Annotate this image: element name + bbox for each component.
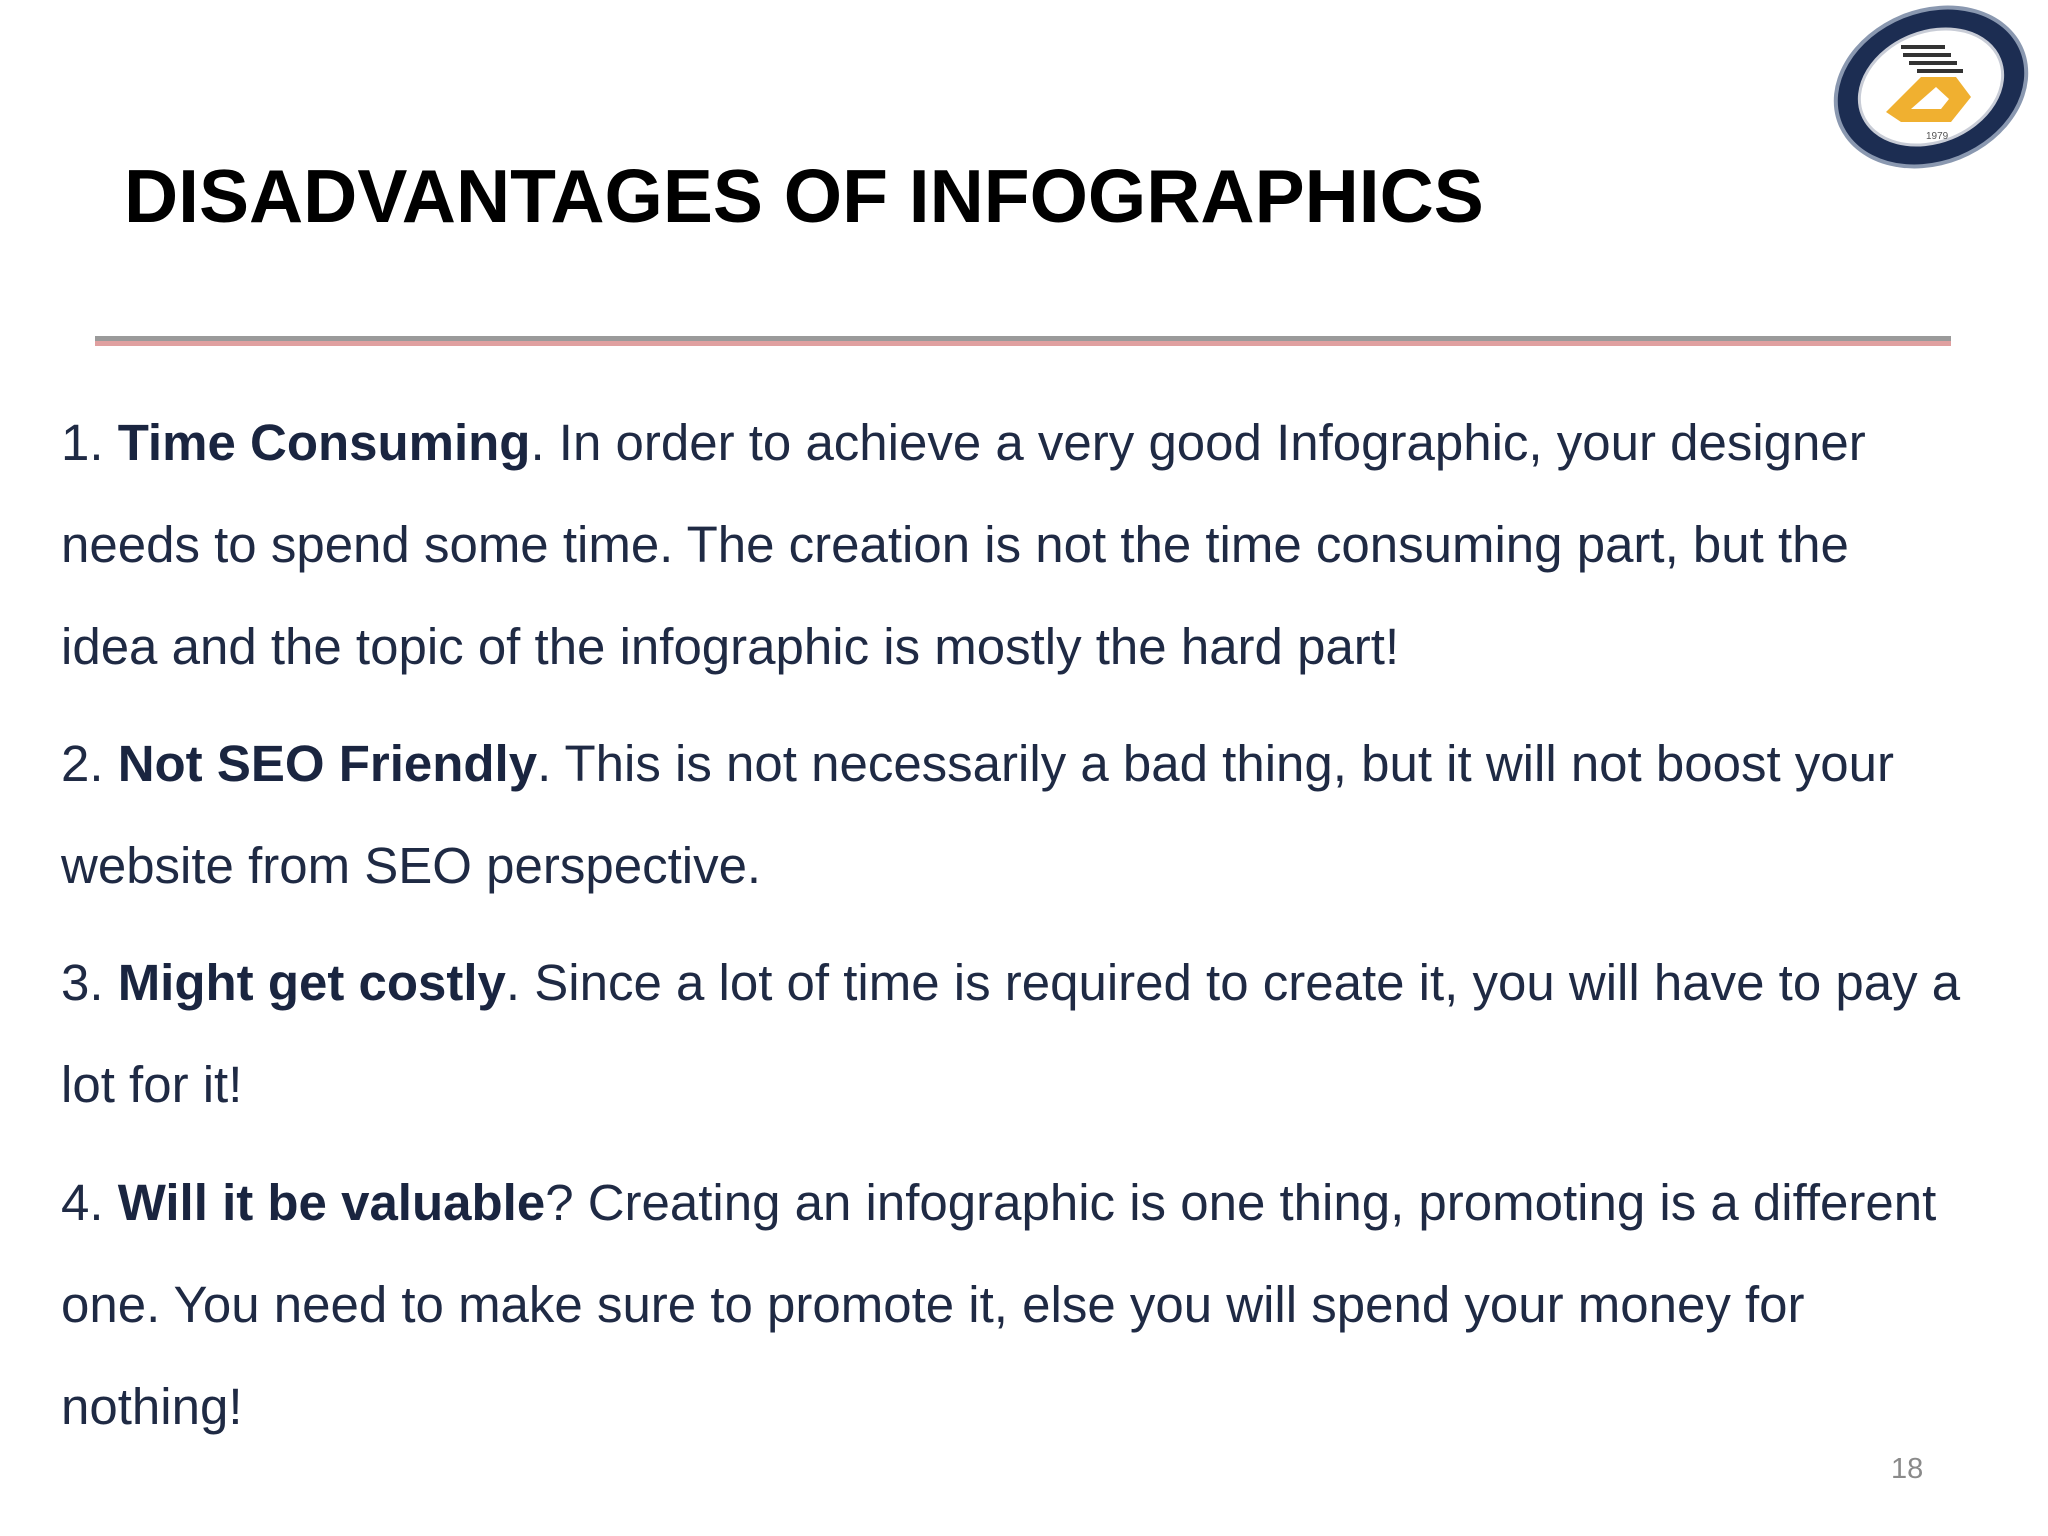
logo: 1979 [1926, 131, 1949, 142]
text: nothing! [61, 1378, 242, 1435]
text: lot for it! [61, 1056, 242, 1113]
item 4 [61, 1174, 1936, 1435]
text: website from SEO perspective. [61, 837, 761, 894]
title: DISADVANTAGES OF INFOGRAPHICS [124, 154, 1484, 238]
item 1 [61, 414, 1866, 675]
text: 3. Might get costly. Since a lot of time is required to create it, you will have to pay a [61, 954, 1960, 1011]
item 3 [61, 954, 1960, 1113]
text: 1. Time Consuming. In order to achieve a very good Infographic, your designer [61, 414, 1866, 471]
text: 4. Will it be valuable? Creating an infographic is one thing, promoting is a different [61, 1174, 1936, 1231]
text: one. You need to make sure to promote it, else you will spend your money for [61, 1276, 1805, 1333]
text: idea and the topic of the infographic is mostly the hard part! [61, 618, 1399, 675]
text: 2. Not SEO Friendly. This is not necessarily a bad thing, but it will not boost your [61, 735, 1894, 792]
item 2 [60, 735, 1894, 894]
divider [95, 336, 1951, 346]
logo [1834, 6, 2028, 168]
page number: 18 [1891, 1453, 1923, 1485]
text: needs to spend some time. The creation is not the time consuming part, but the [61, 516, 1849, 573]
